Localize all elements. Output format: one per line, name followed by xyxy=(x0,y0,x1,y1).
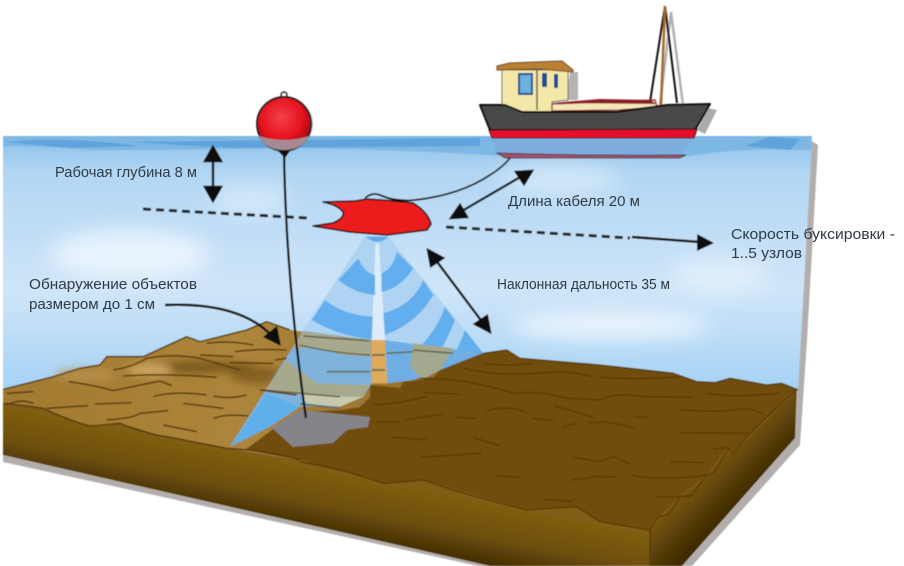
buoy submerged part xyxy=(259,136,309,150)
olive bands xyxy=(265,332,372,407)
soil ridge lines middle xyxy=(300,350,600,522)
deck house xyxy=(552,100,657,111)
soil lines through beam xyxy=(262,336,453,408)
tow speed arrowhead xyxy=(697,234,714,251)
water light patches xyxy=(50,164,770,339)
buoy ring xyxy=(281,92,287,98)
detection arrowhead xyxy=(263,326,281,346)
beam cap xyxy=(365,237,388,242)
tow cable xyxy=(365,158,510,200)
tow speed line xyxy=(632,237,700,242)
keel xyxy=(497,153,686,158)
cabin blue windows xyxy=(542,73,558,88)
soil front face xyxy=(3,403,651,566)
soil top left lit xyxy=(3,322,483,483)
hull shadow xyxy=(697,108,717,134)
buoy ball xyxy=(257,97,311,151)
olive patch right xyxy=(410,343,453,380)
lower pale band xyxy=(300,393,363,407)
water surface band xyxy=(3,136,812,156)
dark wave bands xyxy=(312,252,483,353)
slant range arrow xyxy=(428,250,490,332)
cabin window xyxy=(519,74,532,94)
detection arrow xyxy=(165,305,272,336)
blue tip xyxy=(230,393,300,447)
beam pale base xyxy=(303,237,483,353)
label: detection size: размером до 1 см xyxy=(29,297,155,313)
soil ridge lines right xyxy=(600,365,798,566)
tank shadow xyxy=(3,140,818,566)
cabin xyxy=(502,70,568,112)
label: working depth: Рабочая глубина 8 м xyxy=(55,165,197,181)
soil shading xyxy=(55,361,280,384)
soil ridge lines left xyxy=(3,322,300,460)
ship mast brown xyxy=(661,6,665,105)
ship mast xyxy=(650,6,677,103)
buoy keel xyxy=(278,151,290,158)
cable length arrow xyxy=(451,171,532,218)
seafloor grey patch xyxy=(272,410,370,447)
label: towing speed: Скорость буксировки - xyxy=(731,227,895,243)
label: slant range: Наклонная дальность 35 м xyxy=(497,277,670,293)
cabin shadow xyxy=(566,72,578,100)
water surface highlight xyxy=(6,137,800,150)
soil top right dark xyxy=(245,350,797,530)
centre strip xyxy=(372,243,385,340)
towfish xyxy=(313,199,431,235)
deck roof xyxy=(552,99,657,104)
cabin door line xyxy=(536,70,538,110)
hull xyxy=(480,104,710,130)
tow dashed line right xyxy=(446,227,630,238)
soil right face xyxy=(650,390,797,566)
orange strip xyxy=(372,340,387,383)
label: cable length: Длина кабеля 20 м xyxy=(508,194,640,210)
tow dashed line left xyxy=(143,209,307,218)
label: towing speed value: 1..5 узлов xyxy=(731,246,802,262)
beam over soil left xyxy=(230,331,372,447)
ship mast shadows xyxy=(660,12,683,105)
underwater hull xyxy=(492,139,694,158)
panel: water body xyxy=(3,136,812,392)
buoy rope xyxy=(284,152,306,418)
beam over soil right xyxy=(385,340,483,383)
label: detection: Обнаружение объектов xyxy=(29,277,197,293)
depth arrow xyxy=(205,147,221,201)
red stripe xyxy=(489,129,697,138)
ship xyxy=(480,6,717,158)
buoy xyxy=(257,92,313,418)
cabin roof xyxy=(497,61,573,72)
sonar beams xyxy=(230,237,483,447)
buoy shadow xyxy=(263,99,313,149)
